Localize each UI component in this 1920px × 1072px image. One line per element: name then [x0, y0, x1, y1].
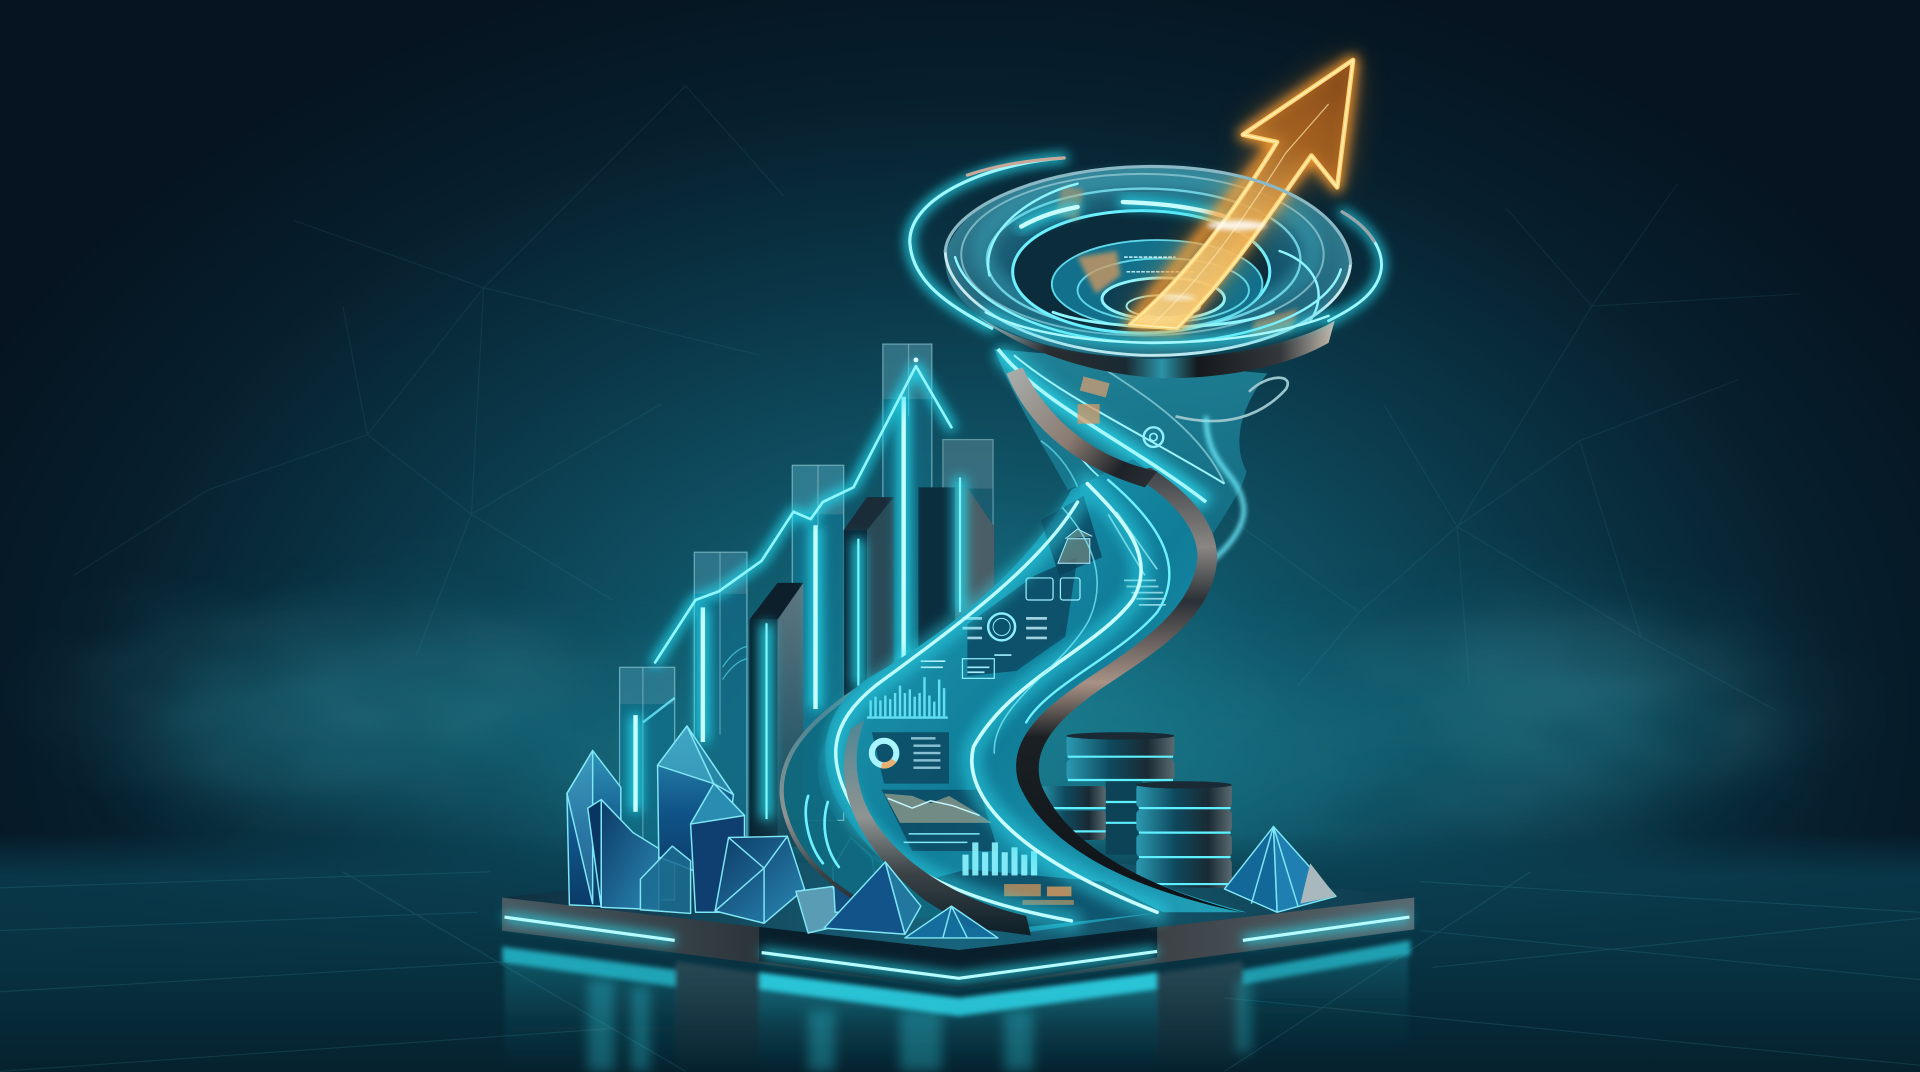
mini bar chart lower — [962, 842, 1037, 875]
orange reflections — [1056, 186, 1298, 338]
bar 2 — [694, 552, 747, 846]
right crystals — [824, 826, 1336, 938]
crystal 2 — [588, 800, 659, 910]
server cylinders — [1038, 732, 1232, 888]
bar 5 — [943, 440, 993, 746]
neon edge lines — [836, 480, 1169, 921]
fog wisps — [73, 600, 1824, 808]
crystal 9 — [905, 906, 998, 938]
fog clouds — [147, 649, 1739, 869]
dark bar B — [844, 497, 894, 759]
area chart — [884, 793, 992, 842]
tornado neck — [994, 349, 1288, 575]
platform slab — [502, 845, 1414, 989]
back ribbon — [782, 683, 967, 921]
orange table — [1004, 884, 1074, 905]
donut gauge — [872, 737, 940, 769]
faint network lines — [73, 86, 1800, 710]
crystals left group — [567, 726, 882, 933]
bar 3 — [792, 465, 844, 820]
right lower band — [1016, 468, 1247, 913]
dark bar C — [918, 487, 994, 710]
neon trend line — [655, 358, 951, 662]
crystal 6 — [715, 836, 804, 923]
neon arcs — [988, 184, 1319, 327]
crystal 3 — [658, 726, 733, 882]
floor — [0, 833, 1920, 1072]
soft inner glow — [982, 180, 1313, 322]
orbit ring back — [910, 158, 1382, 328]
neon verticals — [636, 397, 960, 819]
platform reflection — [502, 940, 1411, 1071]
crystal 4 — [691, 784, 744, 912]
main s-curve ribbon — [825, 459, 1247, 933]
bar 4 — [883, 344, 932, 711]
funnel rim band — [945, 167, 1351, 378]
arrow glow — [1130, 60, 1353, 328]
panel: dark dashboard zones — [872, 496, 1163, 928]
crystal 5 — [640, 846, 691, 913]
dark bar A — [749, 583, 803, 857]
funnel top — [945, 167, 1349, 358]
bar 1 — [620, 667, 675, 900]
crystal 8 — [824, 862, 921, 934]
upper dashboard — [1026, 512, 1166, 605]
circle gauge and labels — [921, 613, 1047, 678]
back stack — [1067, 732, 1174, 855]
data dashes — [1124, 257, 1194, 272]
inner rings — [961, 174, 1324, 335]
metal ribbon bands — [844, 367, 1247, 935]
left stack — [1038, 786, 1106, 840]
right stack — [1136, 781, 1232, 888]
neck band — [1007, 367, 1157, 487]
mini bar chart upper — [867, 677, 948, 719]
crystal 1 — [567, 751, 621, 907]
crystal 7 — [833, 838, 882, 912]
bar chart city — [620, 344, 994, 900]
small block — [796, 886, 845, 933]
pyramid right — [1224, 826, 1336, 912]
left lower band — [844, 720, 1031, 935]
rising arrow — [1130, 60, 1353, 328]
